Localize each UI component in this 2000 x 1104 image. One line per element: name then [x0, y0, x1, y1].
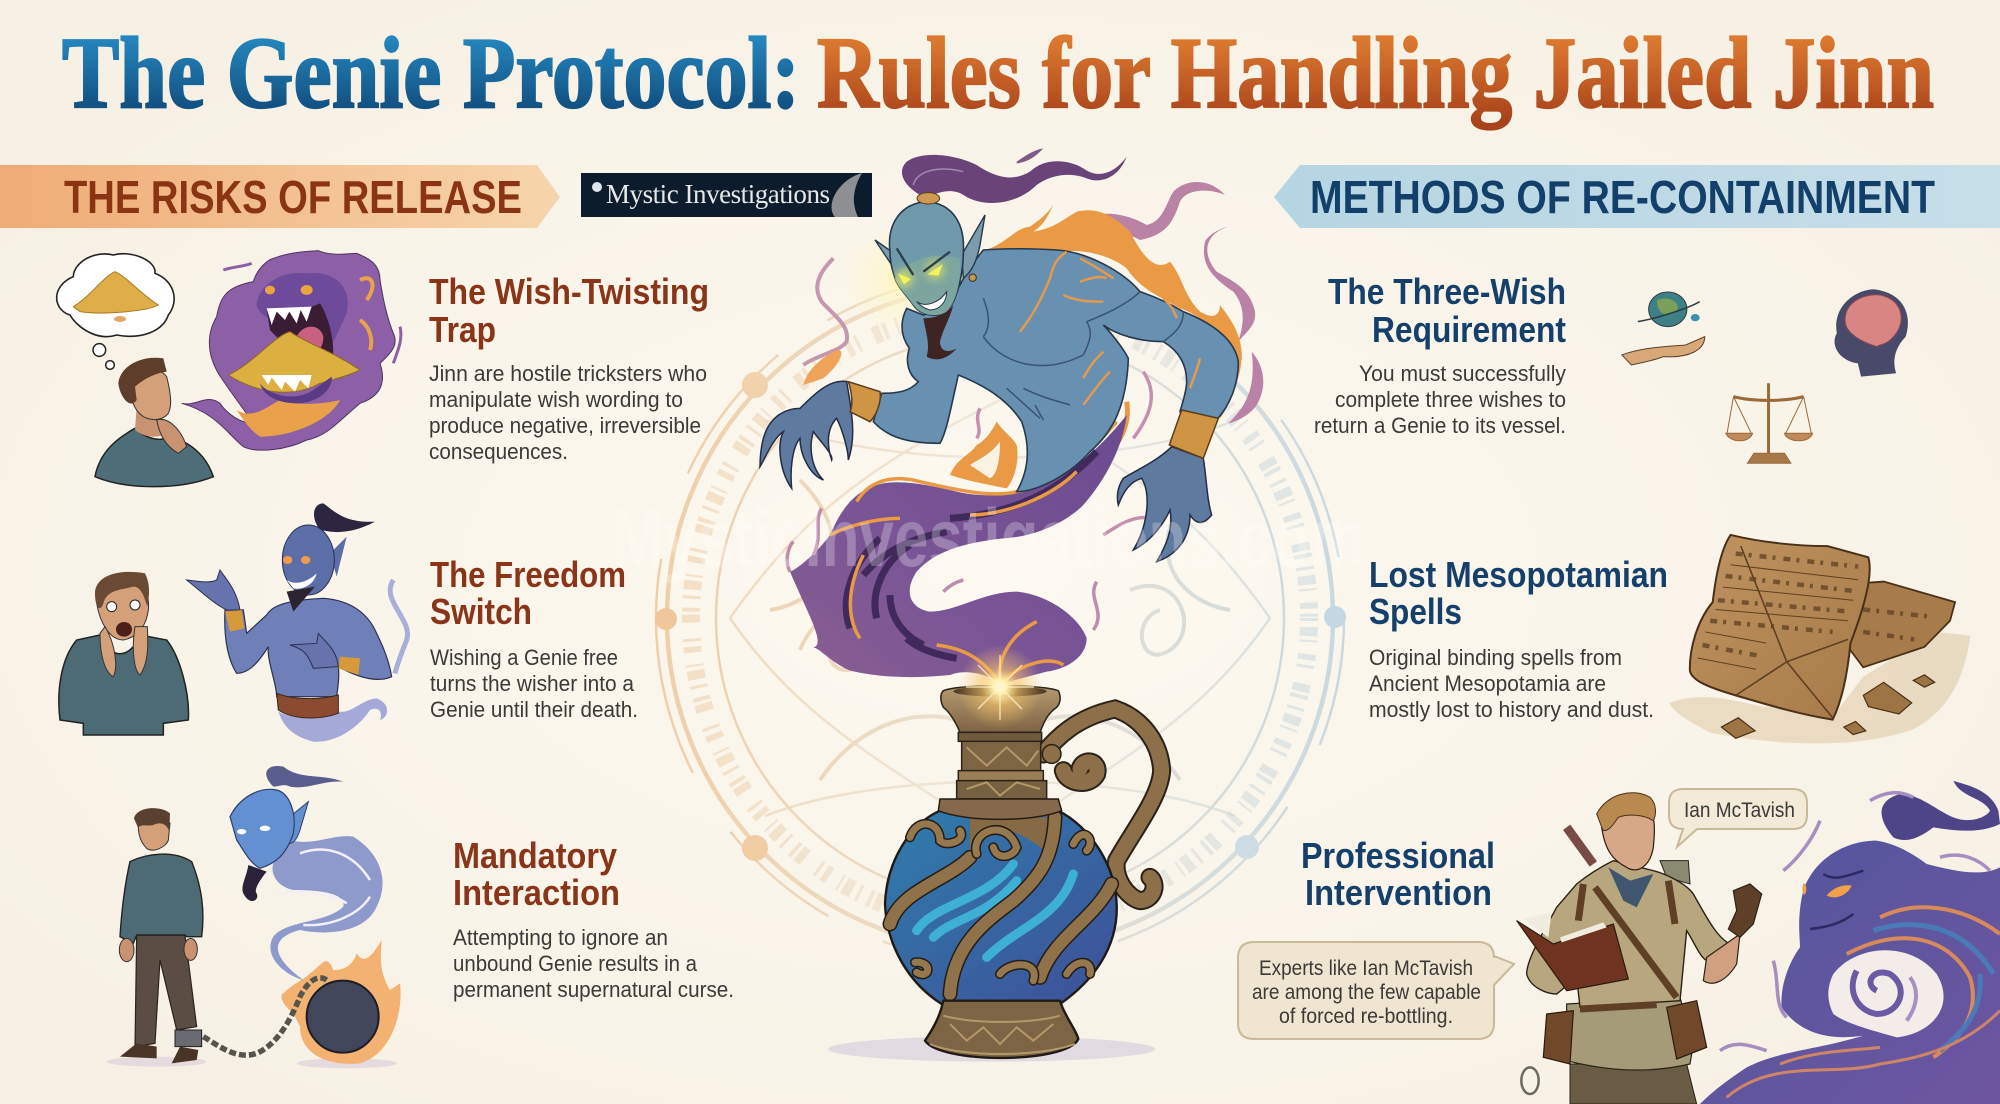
panel: wish-twisting trap [57, 251, 709, 487]
heading: freedom switch: The Freedom [430, 554, 626, 595]
heading: freedom switch: Switch [430, 591, 532, 632]
text: lost mesopotamian spells: Ancient Mesopotamia are [1369, 671, 1606, 696]
callout: experts: Experts like Ian McTavish [1259, 957, 1473, 980]
text: freedom switch: turns the wisher into a [430, 671, 634, 696]
glyph circle [656, 274, 1344, 962]
genie ponytail [902, 148, 1127, 203]
genie hands [760, 381, 1212, 562]
text: wish-twisting trap: Jinn are hostile tricksters who [429, 361, 707, 386]
speech bubble: ian mctavish [1669, 789, 1807, 847]
title [62, 17, 1934, 130]
icon: scales of justice [1726, 383, 1813, 463]
text: freedom switch: Wishing a Genie free [430, 645, 618, 670]
heading: professional intervention: Professional [1301, 835, 1495, 876]
figure straps [1578, 881, 1677, 1009]
dust [1669, 632, 1970, 743]
swirling genie [1700, 781, 2000, 1104]
figure book [1517, 912, 1628, 991]
heading: wish-twisting trap [429, 271, 709, 350]
illustration: chained man and ghost [107, 766, 401, 1068]
heading: freedom switch [430, 554, 626, 632]
thinking man [95, 358, 213, 487]
watermark: MysticInvestigations.com [612, 493, 1365, 584]
ground shadows [107, 1057, 397, 1068]
greedy monster [182, 251, 401, 450]
iron ball [307, 981, 379, 1053]
swirl eddy [1828, 950, 1944, 1037]
heading: three-wish requirement: Requirement [1372, 309, 1566, 350]
text: three-wish requirement: You must successfully [1359, 361, 1567, 386]
swirl bands [1720, 793, 2000, 1097]
text: three-wish requirement [1314, 361, 1567, 438]
figure jacket hem [1567, 997, 1693, 1070]
figure forearm [1703, 934, 1740, 983]
callout: experts: of forced re-bottling. [1279, 1005, 1453, 1028]
glyph circle nodes [655, 372, 1346, 861]
figure bags [1543, 1001, 1707, 1064]
heading: wish-twisting trap: Trap [429, 309, 496, 350]
figure carabiner [1521, 1067, 1539, 1094]
figure glove [1728, 884, 1762, 937]
panel: professional intervention [1238, 781, 2000, 1104]
panel: risks banner [0, 165, 560, 228]
figure scarf [1608, 867, 1653, 907]
jar body [885, 799, 1117, 1004]
text: mandatory interaction: permanent supernatural curse. [453, 977, 734, 1002]
freed genie [187, 503, 408, 742]
logo [581, 173, 872, 217]
genie flames [803, 182, 1263, 535]
heading: mandatory interaction: Interaction [453, 872, 620, 913]
heading: lost mesopotamian spells: Lost Mesopotamian [1369, 554, 1668, 595]
speech bubble: ian mctavish: Ian McTavish [1684, 799, 1795, 822]
text: three-wish requirement: complete three wishes to [1335, 387, 1566, 412]
tablet inscriptions [1697, 546, 1935, 718]
panel: risks banner: THE RISKS OF RELEASE [64, 171, 522, 223]
icon: planet on hand [1622, 292, 1705, 365]
text: three-wish requirement: return a Genie to its vessel. [1314, 413, 1566, 438]
main tablet [1690, 535, 1870, 720]
heading: professional intervention [1301, 835, 1495, 913]
callout: experts: are among the few capable [1252, 981, 1481, 1004]
figure shirt [1527, 861, 1730, 1007]
illustration: man and monster [57, 251, 401, 487]
text: lost mesopotamian spells: mostly lost to history and dust. [1369, 697, 1654, 722]
swirl top knot [1882, 781, 2000, 840]
chain [203, 978, 327, 1055]
callout: experts [1238, 942, 1514, 1039]
tablet fragments [1721, 675, 1935, 738]
genie torso and arms [873, 249, 1238, 492]
panel: three-wish requirement [1314, 271, 1908, 463]
text: wish-twisting trap: manipulate wish wording to [429, 387, 683, 412]
heading: lost mesopotamian spells: Spells [1369, 591, 1462, 632]
heading: lost mesopotamian spells [1369, 554, 1668, 632]
figure backpack [1660, 861, 1690, 884]
text: wish-twisting trap: produce negative, irreversible [429, 413, 701, 438]
icon: head with brain [1835, 289, 1908, 377]
figure head [1602, 803, 1654, 870]
text: mandatory interaction [453, 925, 734, 1002]
swirl body [1700, 841, 2000, 1104]
heading: mandatory interaction [453, 835, 620, 913]
ball flames [281, 940, 401, 1064]
genie halo [840, 222, 973, 335]
genie tail [787, 415, 1127, 684]
jar mouth star [958, 645, 1042, 729]
central genie [760, 148, 1263, 684]
panel: lost mesopotamian spells [1369, 535, 1970, 743]
jar handle [1042, 709, 1162, 901]
genie bracelets [848, 382, 1218, 458]
cursed ghost [230, 766, 383, 980]
jar neck [941, 686, 1060, 799]
text: wish-twisting trap [429, 361, 707, 464]
ian mctavish figure [1517, 793, 1762, 1104]
heading: professional intervention: Intervention [1305, 872, 1492, 913]
text: lost mesopotamian spells: Original binding spells from [1369, 645, 1622, 670]
text: freedom switch [430, 645, 638, 722]
text: lost mesopotamian spells [1369, 645, 1654, 722]
logo: Mystic Investigations [606, 179, 830, 209]
figure pants [1570, 1064, 1697, 1104]
genie jar [828, 686, 1162, 1062]
figure hair [1597, 793, 1656, 831]
jar shadow [828, 1036, 1155, 1062]
heading: three-wish requirement [1328, 271, 1566, 350]
panel: mandatory interaction [107, 766, 734, 1068]
rear tablet [1848, 582, 1955, 667]
scared man [59, 572, 189, 735]
heading: wish-twisting trap: The Wish-Twisting [429, 271, 709, 312]
illustration: scared man and freed genie [59, 503, 408, 742]
heading: mandatory interaction: Mandatory [453, 835, 617, 876]
title: The Genie Protocol: [62, 17, 800, 130]
thought bubble [57, 254, 174, 369]
text: mandatory interaction: unbound Genie results in a [453, 951, 697, 976]
text: wish-twisting trap: consequences. [429, 439, 568, 464]
illustration: broken clay tablets [1669, 535, 1970, 743]
icons: planet, brain, scales [1622, 289, 1908, 463]
genie head [875, 193, 985, 359]
swirl face [1802, 871, 1863, 929]
chained man [119, 808, 203, 1063]
figure sword [1567, 827, 1593, 864]
text: freedom switch: Genie until their death. [430, 697, 638, 722]
heading: three-wish requirement: The Three-Wish [1328, 271, 1566, 312]
text: mandatory interaction: Attempting to ignore an [453, 925, 668, 950]
panel: freedom switch [59, 503, 638, 742]
jar base [925, 1001, 1078, 1058]
